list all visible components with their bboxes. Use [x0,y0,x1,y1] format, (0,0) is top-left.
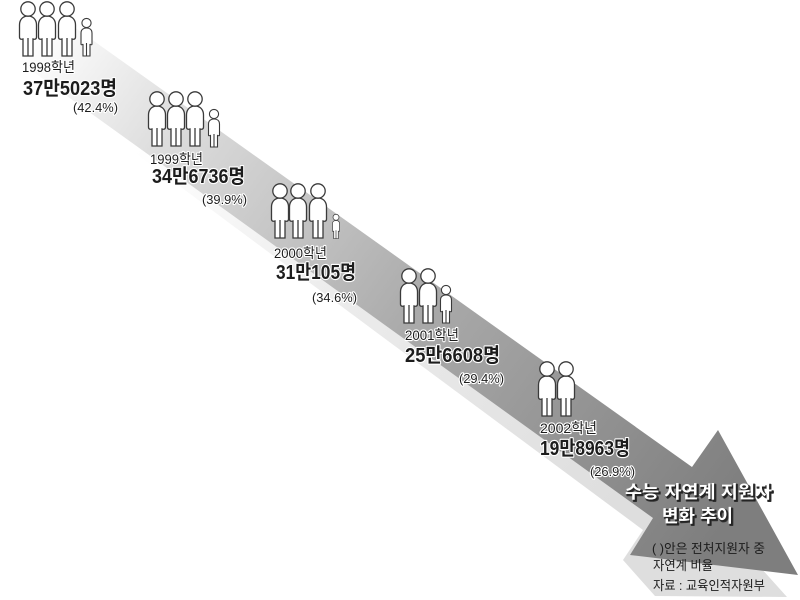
applicants 1998: 37만5023명 [23,77,117,100]
year label 2001: 2001학년 [405,327,459,343]
share 2001: (29.4%) [459,371,504,386]
applicants 2001: 25만6608명 [405,344,500,367]
note and source: 자료 : 교육인적자원부 [653,578,765,593]
title: 수능 자연계 지원자 [625,482,772,502]
year label 1999: 1999학년 [150,151,203,167]
share 1999: (39.9%) [202,192,247,207]
group: 2000 [272,184,357,305]
group: 1999 [148,92,247,207]
share 2002: (26.9%) [590,464,635,479]
applicants 2000: 31만105명 [276,261,356,284]
icon: people 1999 [148,92,220,147]
year label 1998: 1998학년 [22,59,75,75]
icon: people 2001 [400,269,452,323]
group: 1998 [20,2,118,115]
note and source: 자연계 비율 [653,558,713,573]
icon: people 2000 [272,184,340,239]
title: 변화 추이 [664,508,734,528]
share 2000: (34.6%) [312,290,357,305]
year label 2002: 2002학년 [540,420,597,436]
share 1998: (42.4%) [73,100,118,115]
applicants 2002: 19만8963명 [540,437,630,460]
icon: people 1998 [20,2,92,56]
group: 2001 [400,269,504,386]
group: 2002 [538,362,635,479]
note and source [652,541,765,593]
title: 변화 추이 [662,506,733,526]
applicants 1999: 34만6736명 [152,165,245,188]
year label 2000: 2000학년 [274,245,327,261]
note and source: ( )안은 전처지원자 중 [652,541,765,556]
title: 수능 자연계 지원자 [626,484,774,504]
title [625,482,774,528]
icon: people 2002 [538,362,574,416]
